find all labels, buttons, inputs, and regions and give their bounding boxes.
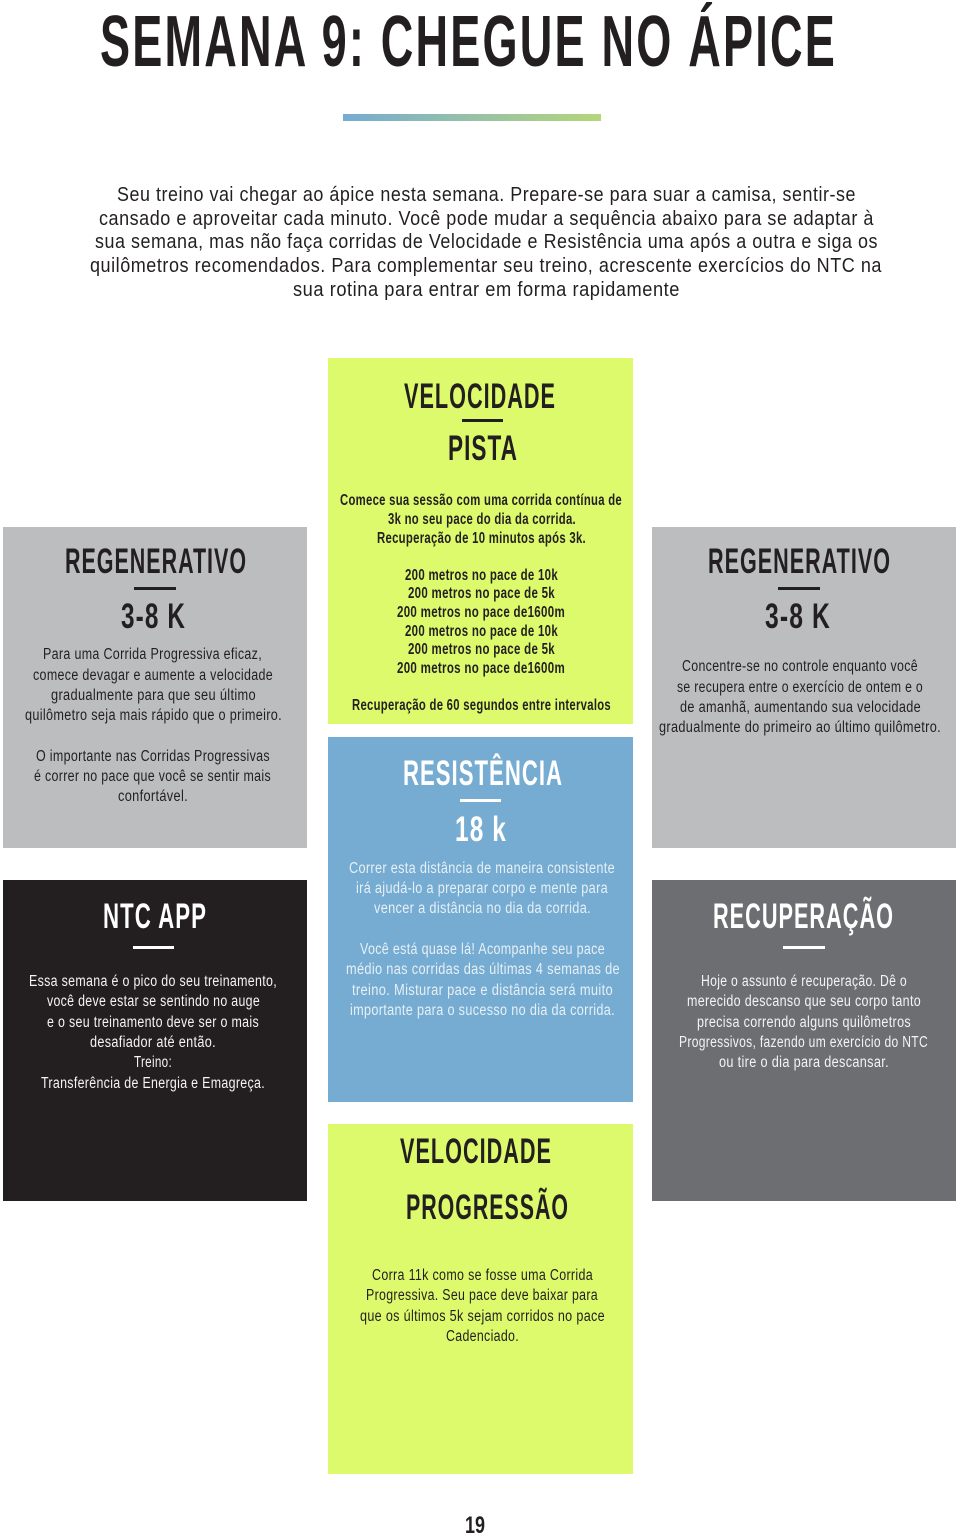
body text: e o seu treinamento deve ser o mais	[47, 1014, 259, 1031]
heading: 18 k: 18 k	[455, 810, 507, 849]
session text: 200 metros no pace de 10k	[405, 567, 558, 584]
body text: Progressiva. Seu pace deve baixar para	[366, 1287, 598, 1304]
gradient divider bar	[343, 114, 601, 121]
intro text block: Seu treino vai chegar ao ápice nesta semana. Prepare-se para suar a camisa, sentir-se	[117, 184, 856, 206]
body text: Hoje o assunto é recuperação. Dê o	[701, 973, 907, 990]
body text: importante para o sucesso no dia da corrida.	[350, 1002, 615, 1019]
session text: 3k no seu pace do dia da corrida.	[388, 511, 576, 528]
session text: Recuperação de 60 segundos entre intervalos	[352, 697, 611, 714]
body text: desafiador até então.	[90, 1034, 216, 1051]
intro text block: sua semana, mas não faça corridas de Velocidade e Resistência uma após a outra e siga os	[95, 231, 878, 253]
heading: ntc app: NTC APP	[103, 897, 207, 936]
body text: comece devagar e aumente a velocidade	[33, 667, 273, 684]
panel: regenerativo direita	[652, 527, 956, 848]
body text	[29, 973, 277, 1092]
panel: velocidade progressao	[328, 1124, 633, 1474]
intro text block	[90, 184, 882, 301]
body text: Você está quase lá! Acompanhe seu pace	[360, 941, 605, 958]
intro text block: quilômetros recomendados. Para complementar seu treino, acrescente exercícios do NTC na	[90, 255, 882, 277]
intro text block: sua rotina para entrar em forma rapidamente	[293, 279, 680, 301]
heading: distance: 3-8 K	[765, 597, 831, 636]
heading: velocidade: VELOCIDADE	[400, 1132, 552, 1171]
session text: 200 metros no pace de 10k	[405, 623, 558, 640]
intro text block: cansado e aproveitar cada minuto. Você pode mudar a sequência abaixo para se adaptar à	[99, 208, 874, 230]
body text: você deve estar se sentindo no auge	[47, 993, 260, 1010]
body text: Cadenciado.	[446, 1328, 519, 1345]
body text: treino. Misturar pace e distância será muito	[352, 982, 613, 999]
body text: gradualmente para que seu último	[51, 687, 256, 704]
heading: velocidade: VELOCIDADE	[404, 377, 556, 416]
heading: distance: 3-8 K	[121, 597, 186, 636]
body text	[25, 646, 282, 805]
session text: 200 metros no pace de1600m	[397, 660, 565, 677]
body text: Correr esta distância de maneira consistente	[349, 860, 615, 877]
panel: ntc app	[3, 880, 307, 1201]
body text: confortável.	[118, 788, 188, 805]
session text: Comece sua sessão com uma corrida contínua de	[340, 492, 622, 509]
body text: Essa semana é o pico do seu treinamento,	[29, 973, 277, 990]
heading: progressao: PROGRESSÃO	[406, 1188, 569, 1227]
body text	[346, 860, 620, 1019]
body text	[679, 973, 928, 1071]
body text: vencer a distância no dia da corrida.	[374, 900, 591, 917]
body text	[659, 658, 941, 736]
body text: médio nas corridas das últimas 4 semanas de	[346, 961, 620, 978]
body text: Corra 11k como se fosse uma Corrida	[372, 1267, 593, 1284]
heading: pista: PISTA	[448, 429, 518, 468]
body text: Para uma Corrida Progressiva eficaz,	[43, 646, 262, 663]
panel: regenerativo esquerda	[3, 527, 307, 848]
body text: ou tire o dia para descansar.	[719, 1054, 889, 1071]
body text: O importante nas Corridas Progressivas	[36, 748, 270, 765]
panel: recuperacao	[652, 880, 956, 1201]
body text: irá ajudá-lo a preparar corpo e mente para	[356, 880, 608, 897]
body text: que os últimos 5k sejam corridos no pace	[360, 1308, 605, 1325]
body text: é correr no pace que você se sentir mais	[34, 768, 271, 785]
heading: regenerativo: REGENERATIVO	[65, 542, 247, 581]
body text: precisa correndo alguns quilômetros	[697, 1014, 911, 1031]
panel: resistencia	[328, 737, 633, 1102]
session text	[340, 492, 622, 714]
session text: 200 metros no pace de 5k	[408, 585, 555, 602]
session text: 200 metros no pace de1600m	[397, 604, 565, 621]
body text	[360, 1267, 605, 1345]
body text: Treino:	[134, 1054, 172, 1071]
body text: quilômetro seja mais rápido que o primeiro.	[25, 707, 282, 724]
panel: velocidade pista	[328, 358, 633, 724]
session text: Recuperação de 10 minutos após 3k.	[377, 530, 586, 547]
body text: Transferência de Energia e Emagreça.	[41, 1075, 265, 1092]
heading: resistencia: RESISTÊNCIA	[403, 753, 563, 793]
session text: 200 metros no pace de 5k	[408, 641, 555, 658]
